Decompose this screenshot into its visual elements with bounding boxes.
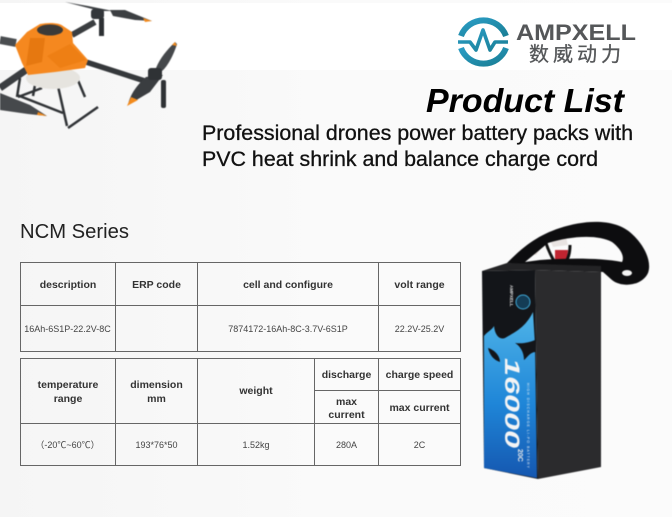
table: product identification [20, 262, 460, 352]
drone orange body [15, 23, 88, 75]
battery side [535, 270, 601, 479]
battery leads and connectors [520, 237, 570, 264]
table headers: volt range [394, 279, 445, 291]
table values: 16Ah-6S1P-22.2V-8C [24, 324, 111, 334]
table values: 193*76*50 [135, 440, 178, 450]
table headers: dimension [130, 379, 183, 391]
table values: （-20℃~60℃） [35, 440, 100, 450]
drone rear arm and rotor [65, 2, 152, 36]
logo: Ampxell [458, 20, 636, 66]
subtitle: Professional drones power battery packs with [202, 122, 633, 145]
table headers [38, 369, 453, 421]
logo chinese name: 数威动力 [529, 43, 621, 66]
table headers: cell and configure [243, 279, 333, 291]
battery emblem [516, 295, 530, 309]
drone right arm and rotor [86, 42, 177, 108]
table headers: range [54, 393, 82, 405]
table values [24, 324, 444, 334]
table headers: max [336, 396, 357, 408]
table headers: description [40, 279, 96, 291]
battery flame graphic [484, 312, 537, 478]
table values [35, 440, 426, 450]
table headers: max current [389, 402, 450, 414]
series heading: NCM Series [20, 221, 129, 243]
subtitle: PVC heat shrink and balance charge cord [202, 148, 598, 171]
table headers: charge speed [386, 369, 453, 381]
drone landing gear [17, 73, 98, 128]
table headers: temperature [38, 379, 98, 391]
title: Product List [426, 82, 626, 119]
table headers: ERP code [132, 279, 181, 291]
table values: 280A [336, 440, 357, 450]
table: specifications [20, 358, 460, 466]
table values: 1.52kg [242, 440, 270, 450]
battery top edge [482, 263, 601, 272]
drone image [0, 2, 177, 128]
logo wordmark: AMPXELL [516, 20, 636, 45]
table values: 22.2V-25.2V [395, 324, 444, 334]
logo icon [458, 20, 508, 64]
table values: 7874172-16Ah-8C-3.7V-6S1P [228, 324, 348, 334]
table headers: mm [147, 393, 166, 405]
table headers: weight [238, 385, 273, 397]
table headers: current [328, 409, 365, 421]
table grid [20, 262, 460, 352]
subtitle [202, 122, 633, 171]
battery label [482, 270, 538, 479]
table values: 2C [414, 440, 426, 450]
strap buckle hole [622, 270, 632, 276]
drone left arms and blade [0, 40, 47, 116]
flame cutouts [488, 340, 536, 362]
battery caption text: HIGH DISCHARGE LI-PO BATTERY [526, 383, 530, 469]
battery brand text: AMPXELL [509, 285, 514, 307]
table headers [40, 279, 445, 291]
battery strap [507, 222, 649, 285]
battery product image [482, 222, 649, 479]
table grid [20, 358, 460, 466]
table headers: discharge [322, 369, 371, 381]
battery rating text: 20C [516, 449, 523, 462]
drone tank [26, 67, 80, 89]
battery capacity text: 16000 [500, 358, 523, 448]
